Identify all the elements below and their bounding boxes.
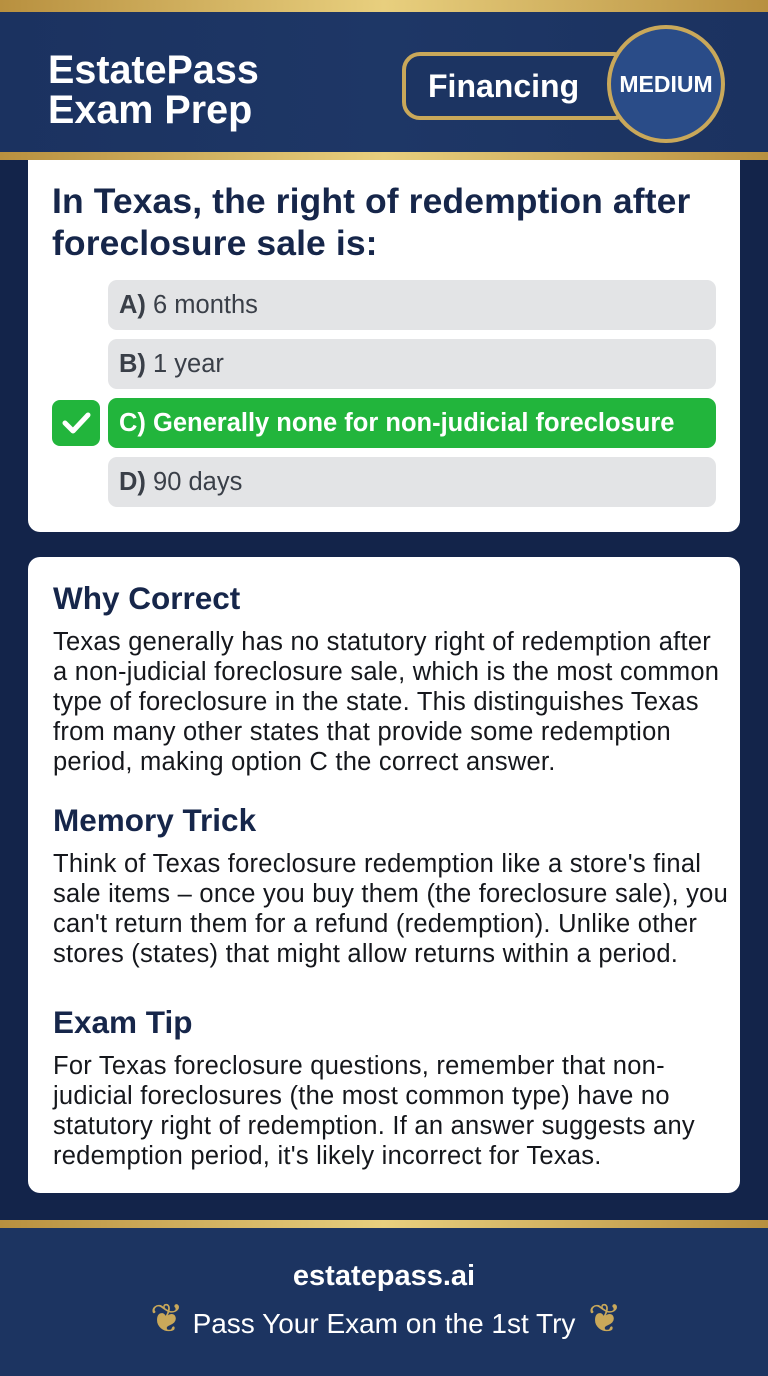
text: why correct: a non-judicial foreclosure sale, which is the most common <box>53 658 719 686</box>
text: why correct: period, making option C the correct answer. <box>53 748 556 776</box>
option D: D) 90 days <box>119 468 242 496</box>
question card <box>28 160 740 532</box>
option C correct <box>108 398 716 448</box>
category pill <box>402 52 632 120</box>
text: exam tip: redemption period, it's likely incorrect for Texas. <box>53 1142 602 1170</box>
question text <box>52 181 690 263</box>
heading: exam tip: Exam Tip <box>53 1004 192 1040</box>
option D <box>108 457 716 507</box>
option A: A) 6 months <box>119 291 258 319</box>
text: why correct <box>53 628 719 776</box>
brand title: EstatePass <box>48 48 259 92</box>
text: exam tip: judicial foreclosures (the most common type) have no <box>53 1082 670 1110</box>
check icon <box>52 400 100 446</box>
text: exam tip: For Texas foreclosure questions, remember that non- <box>53 1052 665 1080</box>
difficulty badge: MEDIUM <box>619 71 713 97</box>
option B <box>108 339 716 389</box>
top gold bar <box>0 0 768 12</box>
option A <box>108 280 716 330</box>
category pill: Financing <box>428 68 579 104</box>
heading: why correct: Why Correct <box>53 580 240 616</box>
text: memory trick: Think of Texas foreclosure redemption like a store's final <box>53 850 701 878</box>
brand title: Exam Prep <box>48 88 252 132</box>
question text: In Texas, the right of redemption after <box>52 181 690 221</box>
explanation card <box>28 557 740 1193</box>
text: memory trick: can't return them for a refund (redemption). Unlike other <box>53 910 697 938</box>
footer gold bar <box>0 1220 768 1228</box>
heading: memory trick: Memory Trick <box>53 802 256 838</box>
header <box>0 12 768 152</box>
text: memory trick: stores (states) that might allow returns within a period. <box>53 940 678 968</box>
text: why correct: type of foreclosure in the state. This distinguishes Texas <box>53 688 699 716</box>
option C correct: C) Generally none for non-judicial foreclosure <box>119 409 674 437</box>
difficulty badge <box>607 25 725 143</box>
laurel left: ❦ <box>150 1297 184 1341</box>
laurel right: ❦ <box>588 1297 622 1341</box>
tagline: Pass Your Exam on the 1st Try <box>193 1308 575 1339</box>
footer <box>0 1228 768 1376</box>
text: exam tip <box>52 1052 695 1170</box>
text: memory trick: sale items – once you buy them (the foreclosure sale), you <box>53 880 728 908</box>
text: exam tip: statutory right of redemption. If an answer suggests any <box>53 1112 695 1140</box>
text: memory trick <box>53 850 728 968</box>
text: why correct: from many other states that provide some redemption <box>53 718 671 746</box>
footer url: estatepass.ai <box>293 1260 475 1292</box>
gold bar under header <box>0 152 768 160</box>
question text: foreclosure sale is: <box>52 223 378 263</box>
brand title <box>48 48 259 132</box>
text: why correct: Texas generally has no statutory right of redemption after <box>53 628 711 656</box>
option B: B) 1 year <box>119 350 224 378</box>
